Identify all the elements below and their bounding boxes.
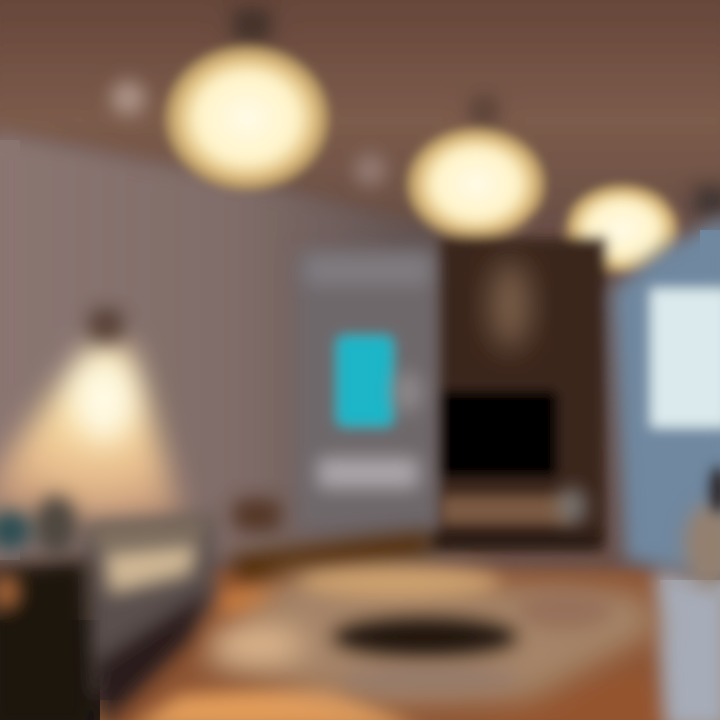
- screen: cyan: [336, 335, 394, 427]
- ceiling spotlight: left: [111, 81, 145, 115]
- center wall panel: [296, 250, 442, 530]
- pendant light: right: [565, 185, 679, 273]
- coffee table: left: [214, 498, 430, 616]
- rug: light band: [300, 566, 500, 598]
- armchair: dark: [0, 495, 92, 720]
- television: [442, 392, 556, 476]
- pendant cord: middle light: [470, 96, 498, 126]
- dark fixture: top right: [694, 186, 720, 216]
- chair: right edge: [684, 466, 720, 587]
- floor: [100, 570, 720, 720]
- ceiling spotlight: middle: [354, 154, 386, 186]
- sofa: cushion: [104, 544, 198, 594]
- right floor highlight: [655, 570, 720, 720]
- dark cabinet: [430, 238, 606, 550]
- pendant light: large: [165, 46, 329, 190]
- window wall: blue: [612, 215, 720, 580]
- wall lamp glow: [0, 308, 185, 525]
- pendant light: middle: [407, 128, 545, 240]
- rug: right patch: [517, 590, 613, 630]
- background: ceiling and wall: [0, 0, 720, 560]
- window: bright pane: [650, 288, 720, 428]
- rug: [200, 566, 660, 705]
- sofa: [85, 515, 215, 720]
- pendant cord: large light: [232, 8, 272, 42]
- rug: dark oval: [333, 617, 517, 657]
